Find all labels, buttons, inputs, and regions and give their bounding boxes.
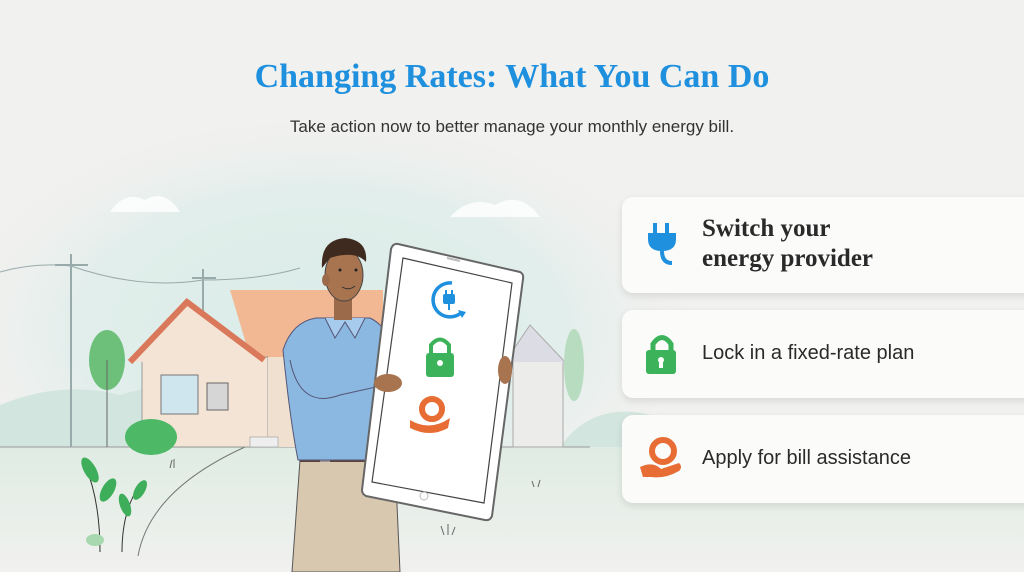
pants bbox=[292, 460, 400, 572]
icon: lifebuoy hand bbox=[640, 437, 681, 478]
subtitle: Take action now to better manage your monthly energy bill. bbox=[290, 117, 734, 136]
text: energy provider bbox=[702, 245, 873, 272]
title: Changing Rates: What You Can Do bbox=[255, 58, 769, 95]
card: bill assistance bbox=[622, 415, 1024, 503]
card: fixed rate bbox=[622, 310, 1024, 398]
right house bbox=[513, 360, 563, 447]
text: Apply for bill assistance bbox=[702, 447, 911, 469]
tablet bbox=[362, 244, 523, 520]
card: switch provider bbox=[622, 197, 1024, 293]
text: Switch your bbox=[702, 215, 830, 242]
tree left bbox=[89, 330, 125, 390]
head bbox=[334, 296, 352, 320]
text bbox=[702, 215, 873, 272]
illustration: man with tablet bbox=[282, 238, 524, 572]
text: Lock in a fixed-rate plan bbox=[702, 342, 914, 364]
bush bbox=[125, 419, 177, 455]
clouds bbox=[110, 196, 180, 212]
poles bbox=[0, 254, 300, 447]
icon: plug bbox=[648, 223, 676, 265]
icon: lock bbox=[646, 335, 676, 374]
house bbox=[230, 290, 383, 357]
hills bbox=[0, 384, 300, 447]
screen icons bbox=[433, 283, 462, 317]
hands bbox=[374, 374, 402, 392]
shirt bbox=[283, 318, 392, 460]
plants bbox=[85, 465, 140, 552]
